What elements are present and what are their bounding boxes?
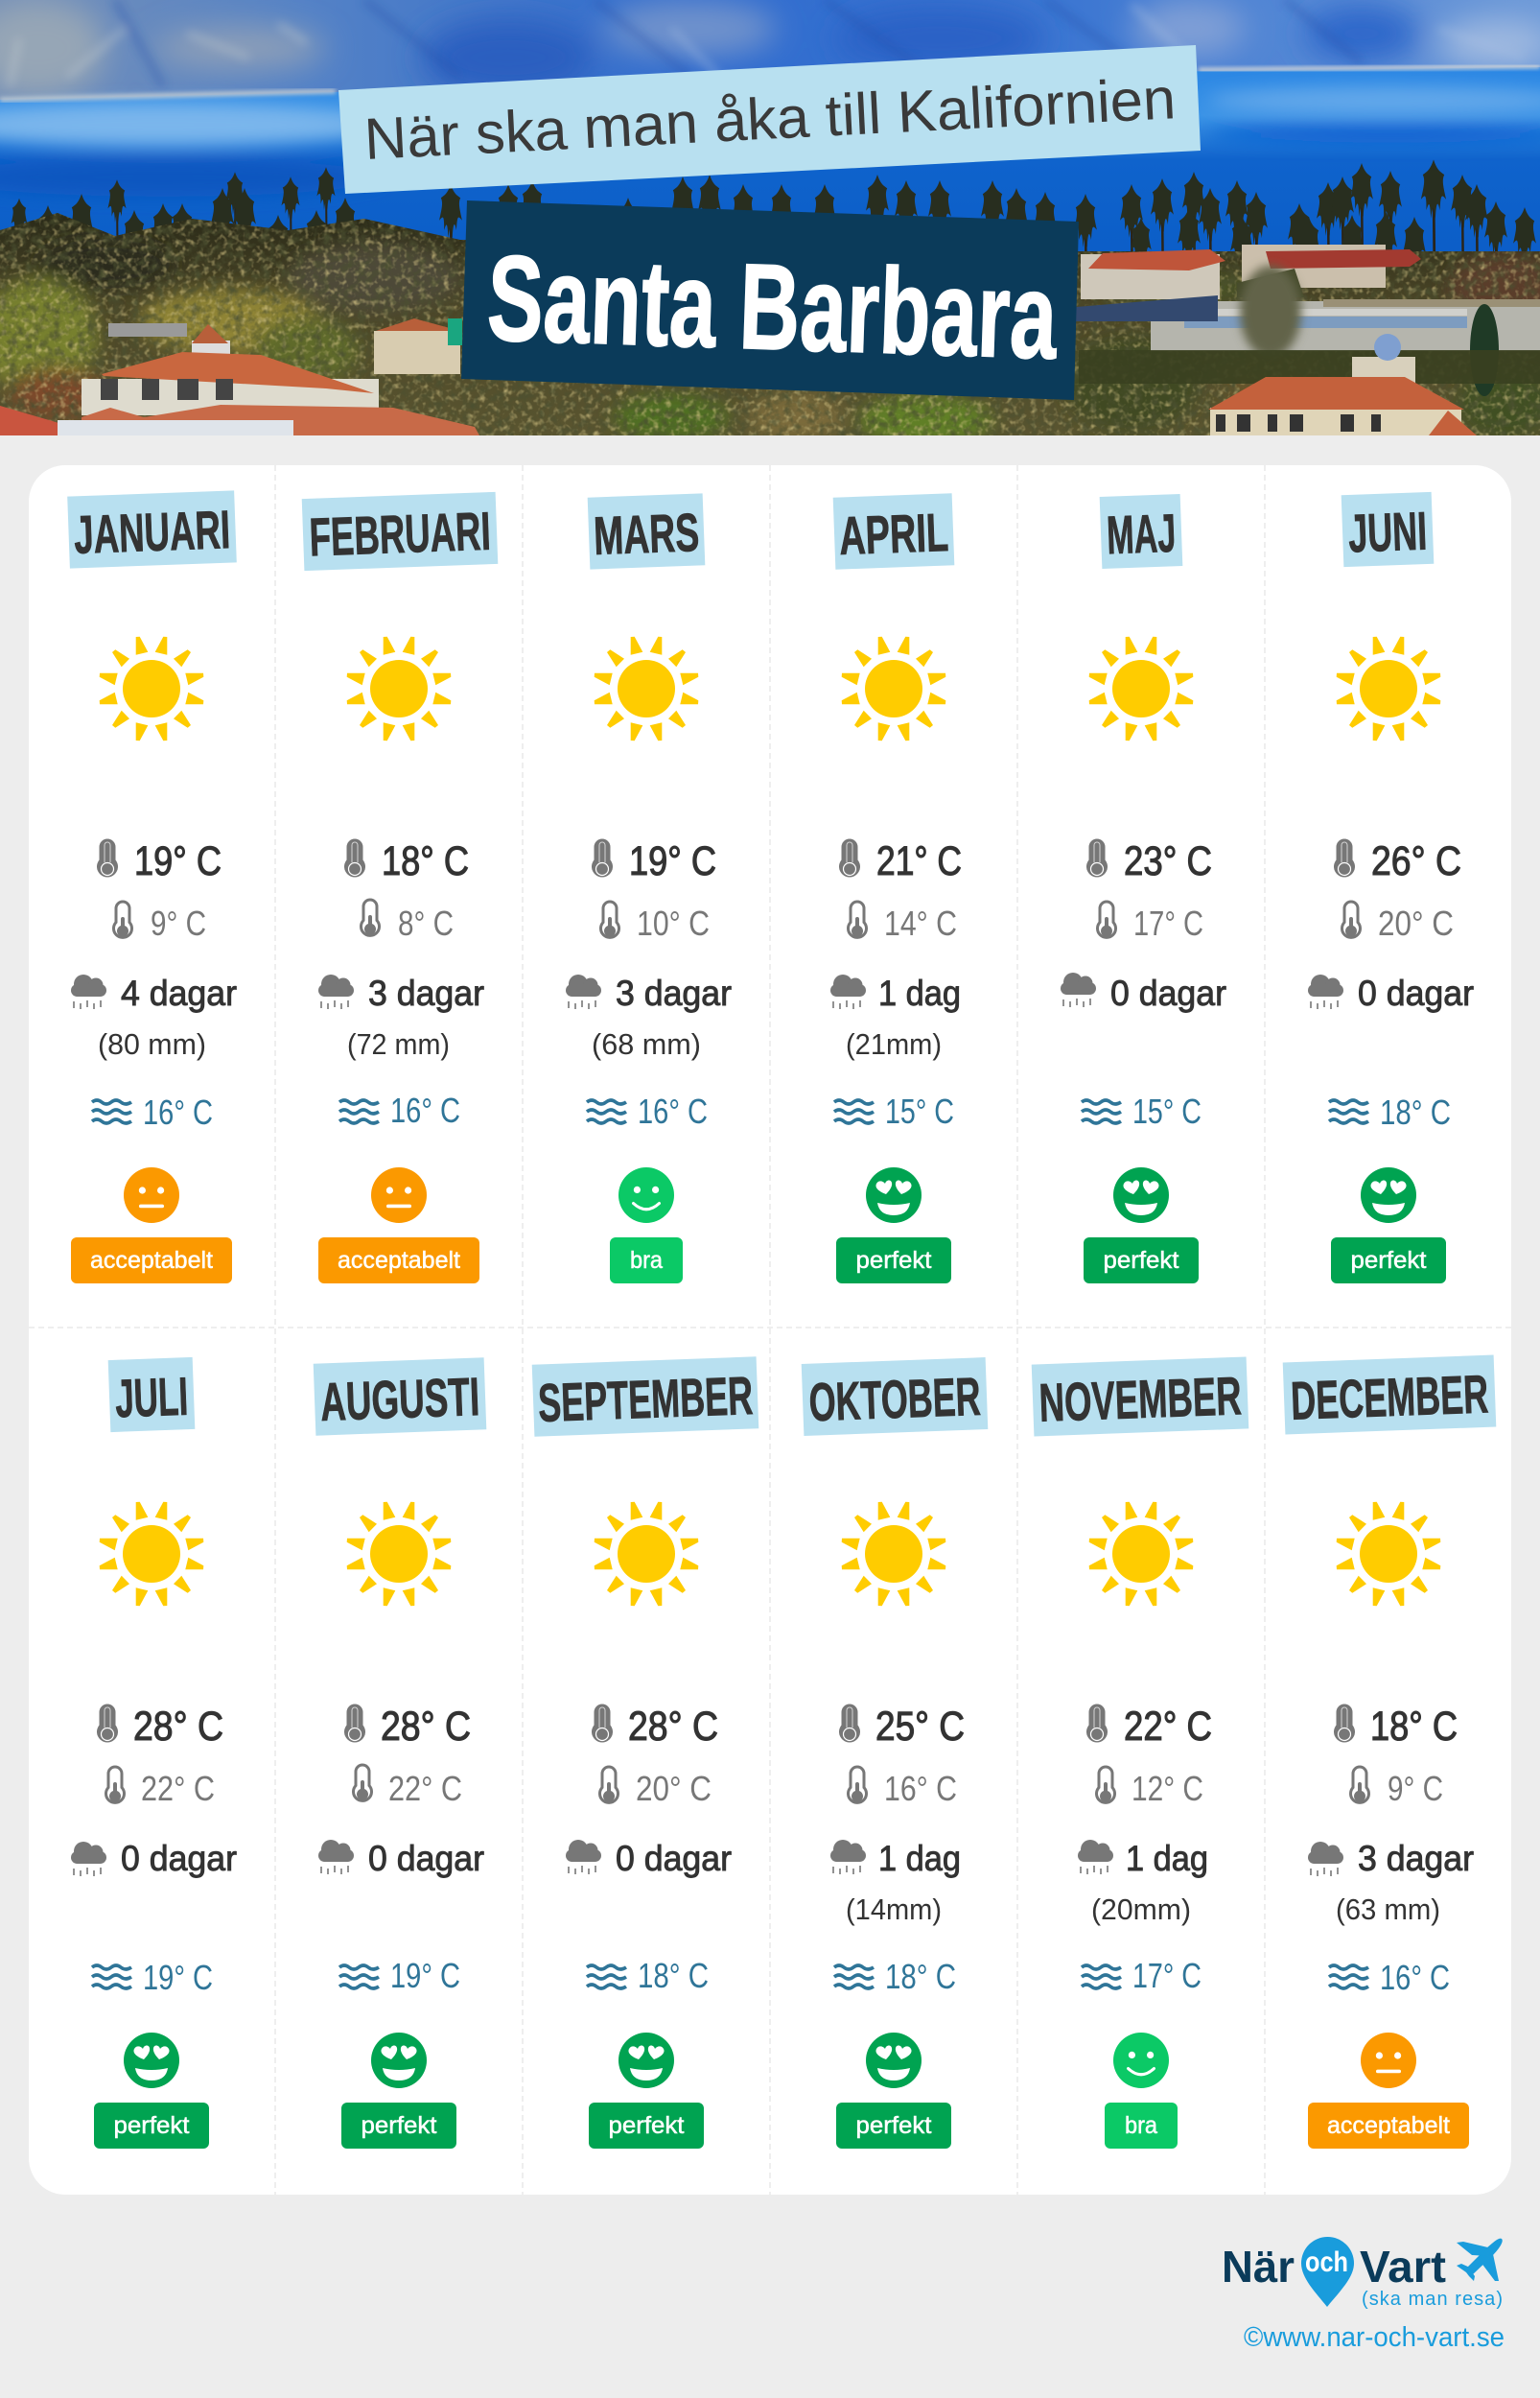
rating: acceptabelt: acceptabelt (1327, 2112, 1450, 2139)
month column: December (1283, 1355, 1496, 2149)
sea temperature (339, 1956, 460, 1995)
rating: acceptabelt (1308, 2033, 1469, 2149)
rating: perfekt: perfekt (1350, 1247, 1427, 1274)
month label: APRIL (838, 502, 949, 566)
month label: JUNI (1347, 501, 1428, 563)
high temperature (839, 1704, 965, 1750)
month label: JULI (114, 1366, 189, 1428)
rain days (318, 974, 484, 1013)
low temperature (600, 902, 710, 943)
month label (1100, 494, 1182, 569)
rain days (71, 1839, 237, 1878)
panel: climate calendar (29, 465, 1511, 2195)
rain days (566, 974, 732, 1013)
icon: sun (1337, 637, 1440, 741)
rating: bra: bra (630, 1247, 663, 1274)
month label: JANUARI (73, 499, 231, 565)
high temperature (1086, 838, 1212, 884)
rain days (830, 974, 961, 1013)
rating: perfekt (1331, 1167, 1446, 1283)
month label: OKTOBER (808, 1366, 982, 1432)
month label: MAJ (1106, 503, 1177, 565)
sea temperature: 19° C (143, 1958, 213, 1997)
low temperature: 8° C (398, 904, 454, 943)
low temperature (848, 902, 957, 943)
sea temperature: 18° C (885, 1957, 956, 1996)
high temperature: 18° C (1370, 1704, 1458, 1750)
logo: När och Vart (1222, 2237, 1503, 2310)
icon: sun (347, 637, 451, 741)
month label (108, 1357, 195, 1432)
rating: bra (610, 1167, 683, 1283)
rain days (1078, 1839, 1208, 1878)
high temperature (97, 838, 222, 884)
rating: perfekt: perfekt (855, 2112, 932, 2139)
high temperature (1334, 838, 1461, 884)
high temperature (344, 1704, 471, 1750)
sea temperature (1082, 1956, 1202, 1995)
month column: Maj (1061, 494, 1226, 1283)
sea temperature (834, 1092, 954, 1131)
month label (802, 1357, 988, 1436)
icon: sun (1337, 1502, 1440, 1606)
month label (1342, 492, 1434, 567)
high temperature: 22° C (1124, 1704, 1212, 1750)
low temperature (1097, 902, 1203, 943)
rainfall: (80 mm) (98, 1027, 206, 1061)
rating: perfekt (341, 2033, 456, 2149)
high temperature: 18° C (382, 838, 469, 884)
logo: När och Vart: och (1305, 2246, 1348, 2278)
month column: Augusti (314, 1357, 486, 2149)
rain days: 0 dagar (616, 1839, 732, 1878)
title banner: När ska man åka till Kalifornien: När ska man åka till Kalifornien (362, 65, 1178, 172)
rainfall: (21mm) (846, 1027, 942, 1061)
rating: perfekt (836, 2033, 951, 2149)
low temperature: 9° C (151, 904, 206, 943)
low temperature: 10° C (637, 904, 710, 943)
rain days: 1 dag (878, 1839, 961, 1878)
low temperature (361, 900, 454, 943)
high temperature: 19° C (629, 838, 716, 884)
month label: SEPTEMBER (537, 1365, 754, 1433)
month label (67, 490, 237, 569)
rating: perfekt: perfekt (1103, 1247, 1179, 1274)
high temperature: 19° C (134, 838, 222, 884)
icon: sun (100, 1502, 203, 1606)
month column: Juli (71, 1357, 237, 2149)
rating: perfekt (836, 1167, 951, 1283)
icon: sun (842, 1502, 945, 1606)
title banner: Santa Barbara: Santa Barbara (485, 229, 1060, 385)
rain days: 0 dagar (121, 1839, 237, 1878)
low temperature: 20° C (1378, 904, 1454, 943)
rating: perfekt (94, 2033, 209, 2149)
month column: Januari (67, 490, 237, 1283)
rain days: 0 dagar (1110, 974, 1226, 1013)
sea temperature (587, 1956, 709, 1995)
sea temperature: 15° C (1132, 1092, 1202, 1131)
rating: perfekt (1084, 1167, 1199, 1283)
sea temperature (1082, 1092, 1202, 1131)
low temperature (113, 902, 206, 943)
low temperature (105, 1767, 215, 1808)
rainfall: (68 mm) (592, 1027, 701, 1061)
month column: Oktober (802, 1357, 988, 2149)
month label (588, 493, 705, 570)
low temperature: 9° C (1388, 1769, 1443, 1808)
rating: acceptabelt (318, 1167, 479, 1283)
rain days (1061, 973, 1226, 1013)
banner photo: Santa Barbara coast (0, 0, 1540, 435)
title banner: När ska man åka till Kalifornien (338, 45, 1201, 194)
sea temperature (92, 1093, 213, 1132)
month label (833, 493, 954, 570)
rating: bra (1105, 2033, 1178, 2149)
website credit: ©www.nar-och-vart.se (1244, 2322, 1505, 2353)
rating: perfekt: perfekt (361, 2112, 437, 2139)
rating: acceptabelt (71, 1167, 232, 1283)
icon: sun (100, 637, 203, 741)
month column: Mars (566, 493, 732, 1283)
high temperature: 28° C (628, 1704, 718, 1750)
high temperature (1086, 1704, 1212, 1750)
high temperature (344, 838, 469, 884)
high temperature (592, 838, 716, 884)
rating: perfekt: perfekt (113, 2112, 190, 2139)
low temperature (1097, 1767, 1203, 1808)
low temperature (353, 1765, 462, 1808)
rain days (830, 1839, 961, 1878)
sea temperature: 16° C (390, 1091, 460, 1130)
sea temperature (834, 1957, 956, 1996)
sea temperature: 15° C (885, 1092, 954, 1131)
icon: sun (347, 1502, 451, 1606)
rain days: 3 dagar (368, 974, 484, 1013)
low temperature (1350, 1767, 1443, 1808)
month label: NOVEMBER (1038, 1365, 1243, 1433)
month column: Februari (302, 492, 498, 1283)
rain days: 3 dagar (1358, 1839, 1474, 1878)
rain days (566, 1839, 732, 1878)
rainfall: (14mm) (846, 1893, 942, 1926)
sea temperature: 16° C (638, 1092, 708, 1131)
high temperature: 28° C (381, 1704, 471, 1750)
low temperature (600, 1767, 712, 1808)
low temperature: 14° C (884, 904, 957, 943)
rain days (71, 974, 237, 1013)
high temperature (592, 1704, 718, 1750)
icon: sun (595, 1502, 698, 1606)
sea temperature (339, 1091, 460, 1130)
rain days: 3 dagar (616, 974, 732, 1013)
high temperature: 23° C (1124, 838, 1212, 884)
rain days (1308, 974, 1474, 1013)
low temperature (848, 1767, 957, 1808)
icon: sun (595, 637, 698, 741)
sea temperature (1329, 1958, 1450, 1997)
low temperature: 17° C (1133, 904, 1203, 943)
sea temperature (587, 1092, 708, 1131)
icon: sun (1089, 1502, 1193, 1606)
rating: perfekt: perfekt (855, 1247, 932, 1274)
rainfall: (72 mm) (347, 1027, 450, 1061)
sea temperature: 19° C (390, 1956, 460, 1995)
month column: November (1032, 1356, 1248, 2149)
month label (1032, 1356, 1248, 1437)
month column: September (532, 1356, 758, 2149)
rating: acceptabelt: acceptabelt (90, 1247, 213, 1274)
month label (314, 1357, 486, 1436)
rain days (318, 1839, 484, 1878)
high temperature: 25° C (875, 1704, 965, 1750)
sea temperature: 17° C (1132, 1956, 1202, 1995)
rain days: 1 dag (878, 974, 961, 1013)
high temperature: 21° C (876, 838, 962, 884)
month column: Juni (1308, 492, 1474, 1283)
month label: FEBRUARI (309, 501, 492, 567)
sea temperature: 18° C (638, 1956, 709, 1995)
rainfall: (20mm) (1091, 1893, 1191, 1926)
low temperature: 12° C (1132, 1769, 1203, 1808)
sea temperature: 18° C (1380, 1093, 1451, 1132)
low temperature: 22° C (141, 1769, 215, 1808)
rain days (1308, 1839, 1474, 1878)
rating: acceptabelt: acceptabelt (338, 1247, 460, 1274)
high temperature (839, 838, 962, 884)
rating: bra: bra (1125, 2112, 1157, 2139)
icon: map pin (1301, 2237, 1354, 2307)
high temperature (97, 1704, 223, 1750)
month label (302, 492, 498, 571)
sea temperature (92, 1958, 213, 1997)
high temperature: 28° C (133, 1704, 223, 1750)
low temperature: 22° C (388, 1769, 462, 1808)
logo: När och Vart: (ska man resa) (1362, 2289, 1503, 2310)
month label: AUGUSTI (319, 1366, 480, 1432)
month label: MARS (593, 502, 700, 566)
logo: När och Vart: När (1222, 2242, 1295, 2292)
high temperature: 26° C (1371, 838, 1461, 884)
logo: När och Vart: Vart (1360, 2242, 1446, 2292)
icon: sun (842, 637, 945, 741)
icon: sun (1089, 637, 1193, 741)
rain days: 4 dagar (121, 974, 237, 1013)
rain days: 0 dagar (368, 1839, 484, 1878)
month column: April (830, 493, 962, 1283)
sea temperature (1329, 1093, 1451, 1132)
sea temperature: 16° C (1380, 1958, 1450, 1997)
low temperature: 16° C (884, 1769, 957, 1808)
sea temperature: 16° C (143, 1093, 213, 1132)
low temperature (1342, 902, 1454, 943)
icon: airplane (1457, 2239, 1503, 2281)
rainfall: (63 mm) (1336, 1893, 1440, 1926)
low temperature: 20° C (636, 1769, 712, 1808)
rain days: 1 dag (1126, 1839, 1208, 1878)
month label (532, 1356, 758, 1437)
rating: perfekt: perfekt (608, 2112, 685, 2139)
rain days: 0 dagar (1358, 974, 1474, 1013)
high temperature (1334, 1704, 1458, 1750)
rating: perfekt (589, 2033, 704, 2149)
title banner: Santa Barbara (461, 200, 1079, 400)
